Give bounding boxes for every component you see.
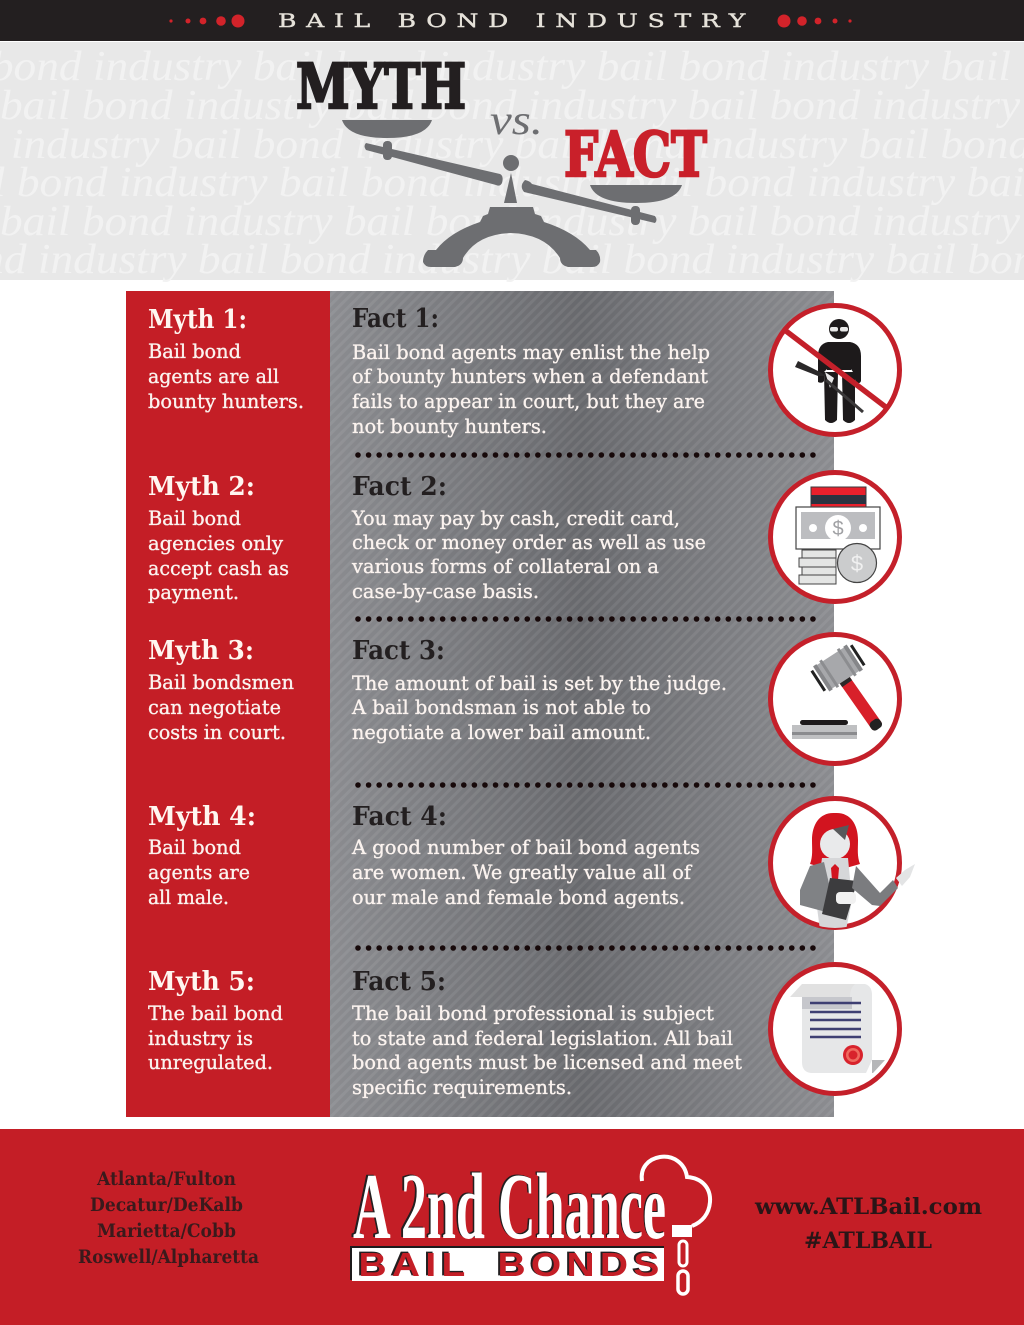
myth 4 text: all male. xyxy=(148,885,229,909)
panel: facts column xyxy=(330,291,834,1117)
gavel handle xyxy=(838,674,884,732)
hunter figure xyxy=(818,319,861,423)
fact 4 text: are women. We greatly value all of xyxy=(352,860,693,884)
fact 5 text: The bail bond professional is subject xyxy=(352,1001,714,1025)
myth 4 text: agents are xyxy=(148,860,250,884)
myth 1 xyxy=(148,305,304,413)
base xyxy=(423,207,600,267)
panel: footer xyxy=(0,1129,1024,1325)
myth 5 text: The bail bond xyxy=(148,1001,283,1025)
fact 5 heading: Fact 5: xyxy=(352,967,446,997)
fact 1 text: of bounty hunters when a defendant xyxy=(352,364,708,388)
fact 4 text: A good number of bail bond agents xyxy=(351,835,700,859)
fact 1 text: fails to appear in court, but they are xyxy=(352,389,705,413)
logo wordmark: A 2nd Chance xyxy=(353,1155,666,1259)
credit cards xyxy=(811,487,866,508)
footer: website and hashtag: #ATLBAIL xyxy=(804,1228,932,1254)
myth 3 text: Bail bondsmen xyxy=(148,670,294,694)
footer: website and hashtag xyxy=(754,1194,982,1254)
fact 5 text: bond agents must be licensed and meet xyxy=(352,1050,742,1074)
fact 3 text: A bail bondsman is not able to xyxy=(351,695,651,719)
myth 2 text: agencies only xyxy=(148,531,284,555)
myth 4 text: Bail bond xyxy=(148,835,241,859)
prohibition slash xyxy=(786,331,887,408)
myth 2 text: Bail bond xyxy=(148,506,241,530)
footer: locations: Roswell/Alpharetta xyxy=(78,1246,259,1268)
myth 3 xyxy=(148,636,294,744)
myth 3 heading: Myth 3: xyxy=(148,636,254,666)
fact 2 text: check or money order as well as use xyxy=(352,530,706,554)
fact 1 text: not bounty hunters. xyxy=(352,414,547,438)
fact 5 text xyxy=(352,1001,742,1099)
fact 5 text: specific requirements. xyxy=(352,1075,572,1099)
fact 2 text xyxy=(351,506,706,603)
icon: female bond agent xyxy=(770,798,915,930)
footer: locations: Decatur/DeKalb xyxy=(90,1194,243,1216)
myth 2 text xyxy=(148,506,289,604)
fact 3 text xyxy=(351,671,727,744)
panel: myths column xyxy=(126,291,331,1117)
agent raised arm and hand xyxy=(836,864,915,906)
myth 4 text xyxy=(148,835,250,909)
rifle xyxy=(795,361,863,412)
logo strip: BAIL xyxy=(358,1246,471,1283)
myth 4 heading: Myth 4: xyxy=(148,802,256,832)
fact 4 text: our male and female bond agents. xyxy=(352,885,685,909)
pivot xyxy=(503,155,519,171)
fact 2 text: case-by-case basis. xyxy=(352,579,539,603)
coin stack xyxy=(799,550,836,584)
myth 1 heading: Myth 1: xyxy=(148,305,247,335)
fact 1 text: Bail bond agents may enlist the help xyxy=(352,340,710,364)
fact 3 xyxy=(351,636,727,744)
myth 3 text xyxy=(148,670,294,744)
sunglasses xyxy=(830,327,848,332)
icon: handcuff and chain xyxy=(642,1157,710,1294)
myth 5 text xyxy=(148,1001,283,1074)
banknote: $ xyxy=(832,518,844,540)
left dots xyxy=(169,14,244,28)
footer: locations: Atlanta/Fulton xyxy=(96,1168,236,1190)
fact 1 xyxy=(352,304,710,438)
heading: MYTH: MYTH xyxy=(296,50,466,123)
myth 2 text: accept cash as xyxy=(148,556,289,580)
icon: no bounty hunters xyxy=(770,306,900,434)
icon: balance scale xyxy=(342,120,682,267)
myth 5 xyxy=(148,967,283,1074)
icon: legal document xyxy=(770,964,900,1094)
right pan xyxy=(590,185,682,203)
seal xyxy=(843,1045,863,1065)
fact 1 text xyxy=(352,340,710,438)
right beam xyxy=(522,180,656,223)
agent figure xyxy=(800,813,860,930)
heading: FACT: FACT xyxy=(564,118,707,191)
coin: $ xyxy=(851,551,863,576)
heading: vs.: vs. xyxy=(490,98,543,144)
paper xyxy=(802,984,872,1073)
left pan xyxy=(342,120,432,138)
fact 5 xyxy=(352,967,742,1099)
myth 1 text xyxy=(148,339,304,413)
myth 5 heading: Myth 5: xyxy=(148,967,255,997)
icon: gavel xyxy=(770,634,900,764)
myth 1 text: bounty hunters. xyxy=(148,389,304,413)
logo strip xyxy=(350,1245,665,1283)
logo wordmark shadow: A 2nd Chance xyxy=(351,1154,665,1258)
top banner xyxy=(0,0,1024,41)
myth 3 text: costs in court. xyxy=(148,720,286,744)
fact 4 xyxy=(351,802,700,909)
header band with repeated text pattern xyxy=(0,42,1024,283)
myth 1 text: agents are all xyxy=(148,364,279,388)
myth 5 text: unregulated. xyxy=(148,1050,273,1074)
myth 3 text: can negotiate xyxy=(148,695,281,719)
fact 2 text: various forms of collateral on a xyxy=(351,554,659,578)
logo strip: BONDS xyxy=(498,1246,665,1283)
myth 2 xyxy=(148,472,289,604)
gavel head xyxy=(808,641,868,695)
banner title: BAIL BOND INDUSTRY xyxy=(278,10,746,32)
fact 2 xyxy=(351,472,706,603)
left beam xyxy=(364,143,503,186)
myth 5 text: industry is xyxy=(148,1026,253,1050)
fact 1 heading: Fact 1: xyxy=(352,304,439,334)
footer: locations xyxy=(78,1168,259,1268)
fact 4 heading: Fact 4: xyxy=(352,802,447,832)
myth 1 text: Bail bond xyxy=(148,339,241,363)
fact 2 heading: Fact 2: xyxy=(352,472,447,502)
fact 2 text: You may pay by cash, credit card, xyxy=(351,506,680,530)
footer: website and hashtag: www.ATLBail.com xyxy=(754,1194,982,1220)
logo: A 2nd Chance Bail Bonds xyxy=(350,1154,710,1294)
text lines xyxy=(810,1003,861,1037)
fact 3 heading: Fact 3: xyxy=(352,636,445,666)
myth 4 xyxy=(148,802,256,909)
logo strip: BAIL xyxy=(357,1245,469,1282)
sound block xyxy=(792,720,857,739)
logo strip: BONDS xyxy=(496,1245,663,1282)
footer: locations: Marietta/Cobb xyxy=(97,1220,236,1242)
fact 3 text: The amount of bail is set by the judge. xyxy=(352,671,727,695)
right dots xyxy=(778,14,852,28)
fact 3 text: negotiate a lower bail amount. xyxy=(352,720,651,744)
icon: cash and cards xyxy=(770,472,900,602)
myth 2 heading: Myth 2: xyxy=(148,472,255,502)
fact 4 text xyxy=(351,835,700,909)
myth 2 text: payment. xyxy=(148,580,239,604)
fact 5 text: to state and federal legislation. All bail xyxy=(352,1026,733,1050)
post xyxy=(504,173,517,203)
